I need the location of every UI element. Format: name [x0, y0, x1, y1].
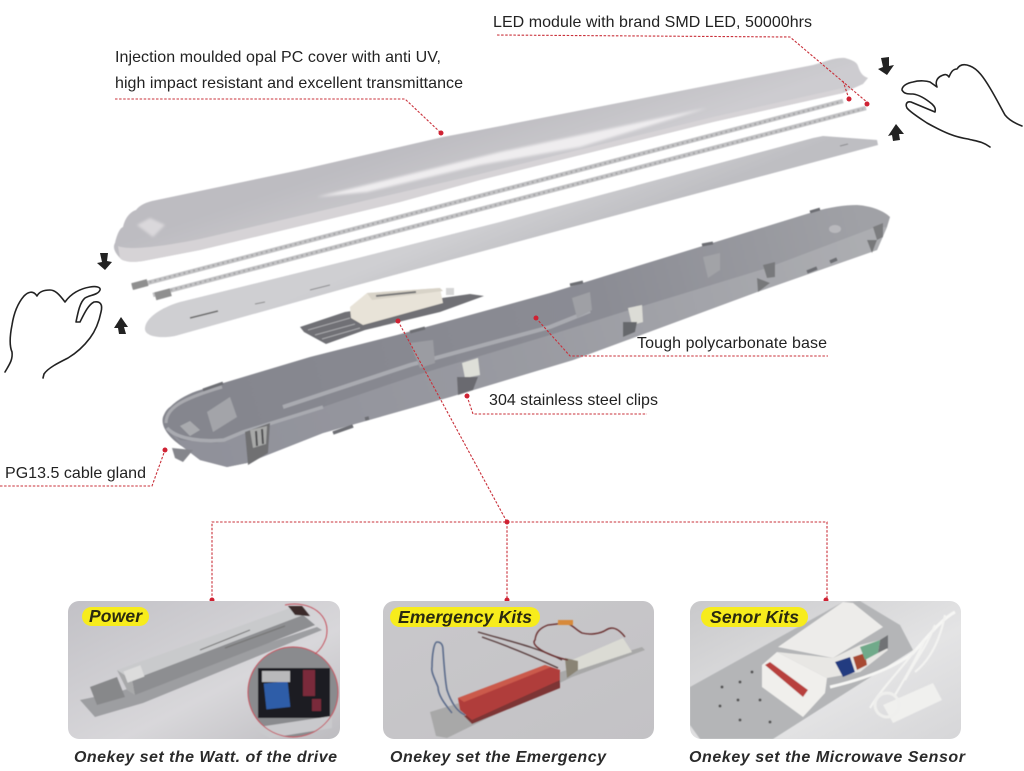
base front wall — [165, 227, 887, 467]
LED strips — [131, 101, 866, 300]
tag: Emergency Kits: Emergency Kits — [398, 607, 532, 627]
icon: arrow up right — [888, 124, 904, 141]
power photo — [68, 601, 340, 739]
cable gland — [172, 448, 193, 462]
panel: Senor Kits — [689, 601, 966, 766]
tag: Senor Kits: Senor Kits — [710, 607, 799, 627]
panel: Emergency Kits — [383, 601, 654, 766]
label: cover: Injection moulded opal PC cover with anti UV, — [115, 49, 441, 66]
panel: Power — [68, 601, 340, 766]
gear tray — [145, 136, 878, 337]
caption: Onekey set the Watt. of the drive — [74, 749, 337, 766]
leader: driver options — [212, 321, 827, 600]
stainless clips — [245, 223, 883, 465]
leader lines — [0, 35, 870, 602]
label: cover — [115, 49, 463, 92]
rim and underside tabs — [203, 209, 820, 390]
icon: arrow down left — [97, 253, 112, 270]
leader: cover — [115, 99, 441, 133]
sensor photo — [690, 601, 961, 739]
tag: Power: Power — [89, 606, 143, 626]
caption: Onekey set the Microwave Sensor — [689, 749, 966, 766]
emergency photo — [383, 601, 654, 739]
LED strip upper — [132, 101, 843, 287]
LED strip lower — [153, 108, 866, 295]
light stripe — [283, 311, 590, 407]
left rim lip — [166, 387, 222, 423]
icon: right hand — [902, 65, 1022, 147]
leader: LED module — [497, 35, 868, 103]
icon: left hand — [5, 287, 102, 378]
label: cable gland: PG13.5 cable gland — [5, 465, 146, 482]
caption: Onekey set the Emergency — [390, 749, 607, 766]
opal PC cover — [114, 58, 868, 262]
leader: base — [536, 318, 828, 356]
label: clips: 304 stainless steel clips — [489, 392, 658, 409]
driver on metal plate — [300, 288, 484, 344]
polycarbonate base — [163, 205, 890, 467]
leader: clips — [467, 396, 647, 414]
label: LED module: LED module with brand SMD LED, 50000hrs — [493, 14, 812, 31]
base interior silhouette — [163, 205, 890, 467]
icon: arrow up left — [114, 317, 128, 334]
posts in base — [180, 225, 841, 436]
icon: arrow down right — [878, 57, 894, 75]
leader: cable gland — [0, 450, 165, 486]
label: base: Tough polycarbonate base — [637, 335, 827, 352]
label: cover: high impact resistant and excellent transmittance — [115, 75, 463, 92]
